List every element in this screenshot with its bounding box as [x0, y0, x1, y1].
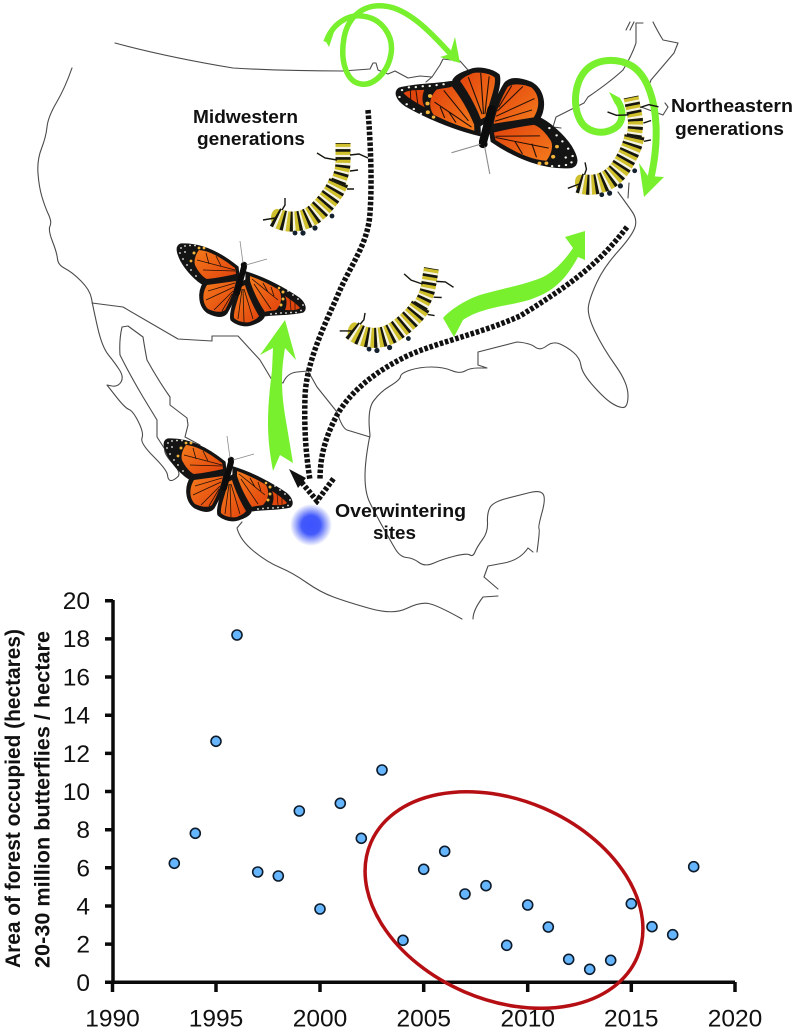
y axis tick labels: 20: [63, 588, 90, 615]
chart axes and ticks: [105, 600, 735, 992]
dashed route: northeastern return: [320, 227, 627, 480]
caterpillar: northeastern: [553, 92, 674, 204]
red ellipse highlighting recent low years: [331, 751, 677, 1036]
label: overwintering sites: Overwintering: [335, 501, 466, 521]
green arrow: midwest to first butterfly: [260, 320, 296, 471]
y axis tick labels: 0: [76, 970, 90, 997]
panel: scatter chart: [2, 588, 762, 1036]
butterfly: overwintering: [164, 436, 292, 521]
x axis tick labels: 2010: [500, 1006, 555, 1033]
y axis title: [2, 629, 54, 968]
y axis tick labels: 14: [63, 702, 90, 730]
caterpillar: central: [337, 255, 456, 364]
y axis tick labels: 4: [76, 894, 90, 920]
y axis tick labels: 10: [63, 779, 90, 806]
green arrow: south to northeast: [443, 231, 585, 337]
label: northeastern generations: generations: [675, 119, 784, 139]
y axis tick labels: 18: [63, 626, 90, 653]
green arrow: northern loop to large butterfly: [325, 6, 460, 84]
butterfly: large northeastern: [396, 65, 577, 177]
y axis tick labels: 6: [76, 856, 90, 882]
y axis tick labels: 12: [63, 741, 90, 768]
x axis tick labels: 2000: [293, 1006, 347, 1033]
label: northeastern generations: [671, 96, 793, 139]
map outline of North America: [38, 22, 678, 619]
panel: migration map: [38, 6, 793, 619]
y axis tick labels: 8: [76, 817, 90, 844]
label: overwintering sites: sites: [373, 523, 416, 543]
y axis tick labels: 2: [76, 932, 90, 958]
y axis tick labels: 16: [63, 664, 90, 692]
x axis tick labels: 1995: [189, 1006, 243, 1033]
dashed arrowhead to overwintering sites: [289, 469, 334, 501]
x axis tick labels: 1990: [85, 1006, 140, 1033]
x axis tick labels: 2020: [708, 1006, 762, 1033]
green arrow: northeastern spiral: [575, 60, 664, 197]
x axis tick labels: [85, 1006, 762, 1033]
dashed route: midwestern return: [305, 110, 371, 480]
y axis title: 20-30 million butterflies / hectare: [32, 631, 54, 968]
y axis tick labels: [63, 588, 90, 997]
caterpillar: midwestern: [263, 143, 368, 236]
label: midwestern generations: generations: [197, 129, 305, 149]
x axis tick labels: 2015: [604, 1006, 659, 1033]
label: midwestern generations: [193, 107, 305, 149]
label: midwestern generations: Midwestern: [193, 107, 298, 127]
y axis title: Area of forest occupied (hectares): [2, 629, 25, 968]
data points by year: [169, 630, 699, 974]
x axis tick labels: 2005: [396, 1006, 451, 1033]
butterfly: midwestern: [177, 241, 305, 326]
label: overwintering sites: [335, 501, 466, 543]
label: northeastern generations: Northeastern: [671, 96, 793, 116]
icon: overwintering site glow: [290, 504, 332, 546]
